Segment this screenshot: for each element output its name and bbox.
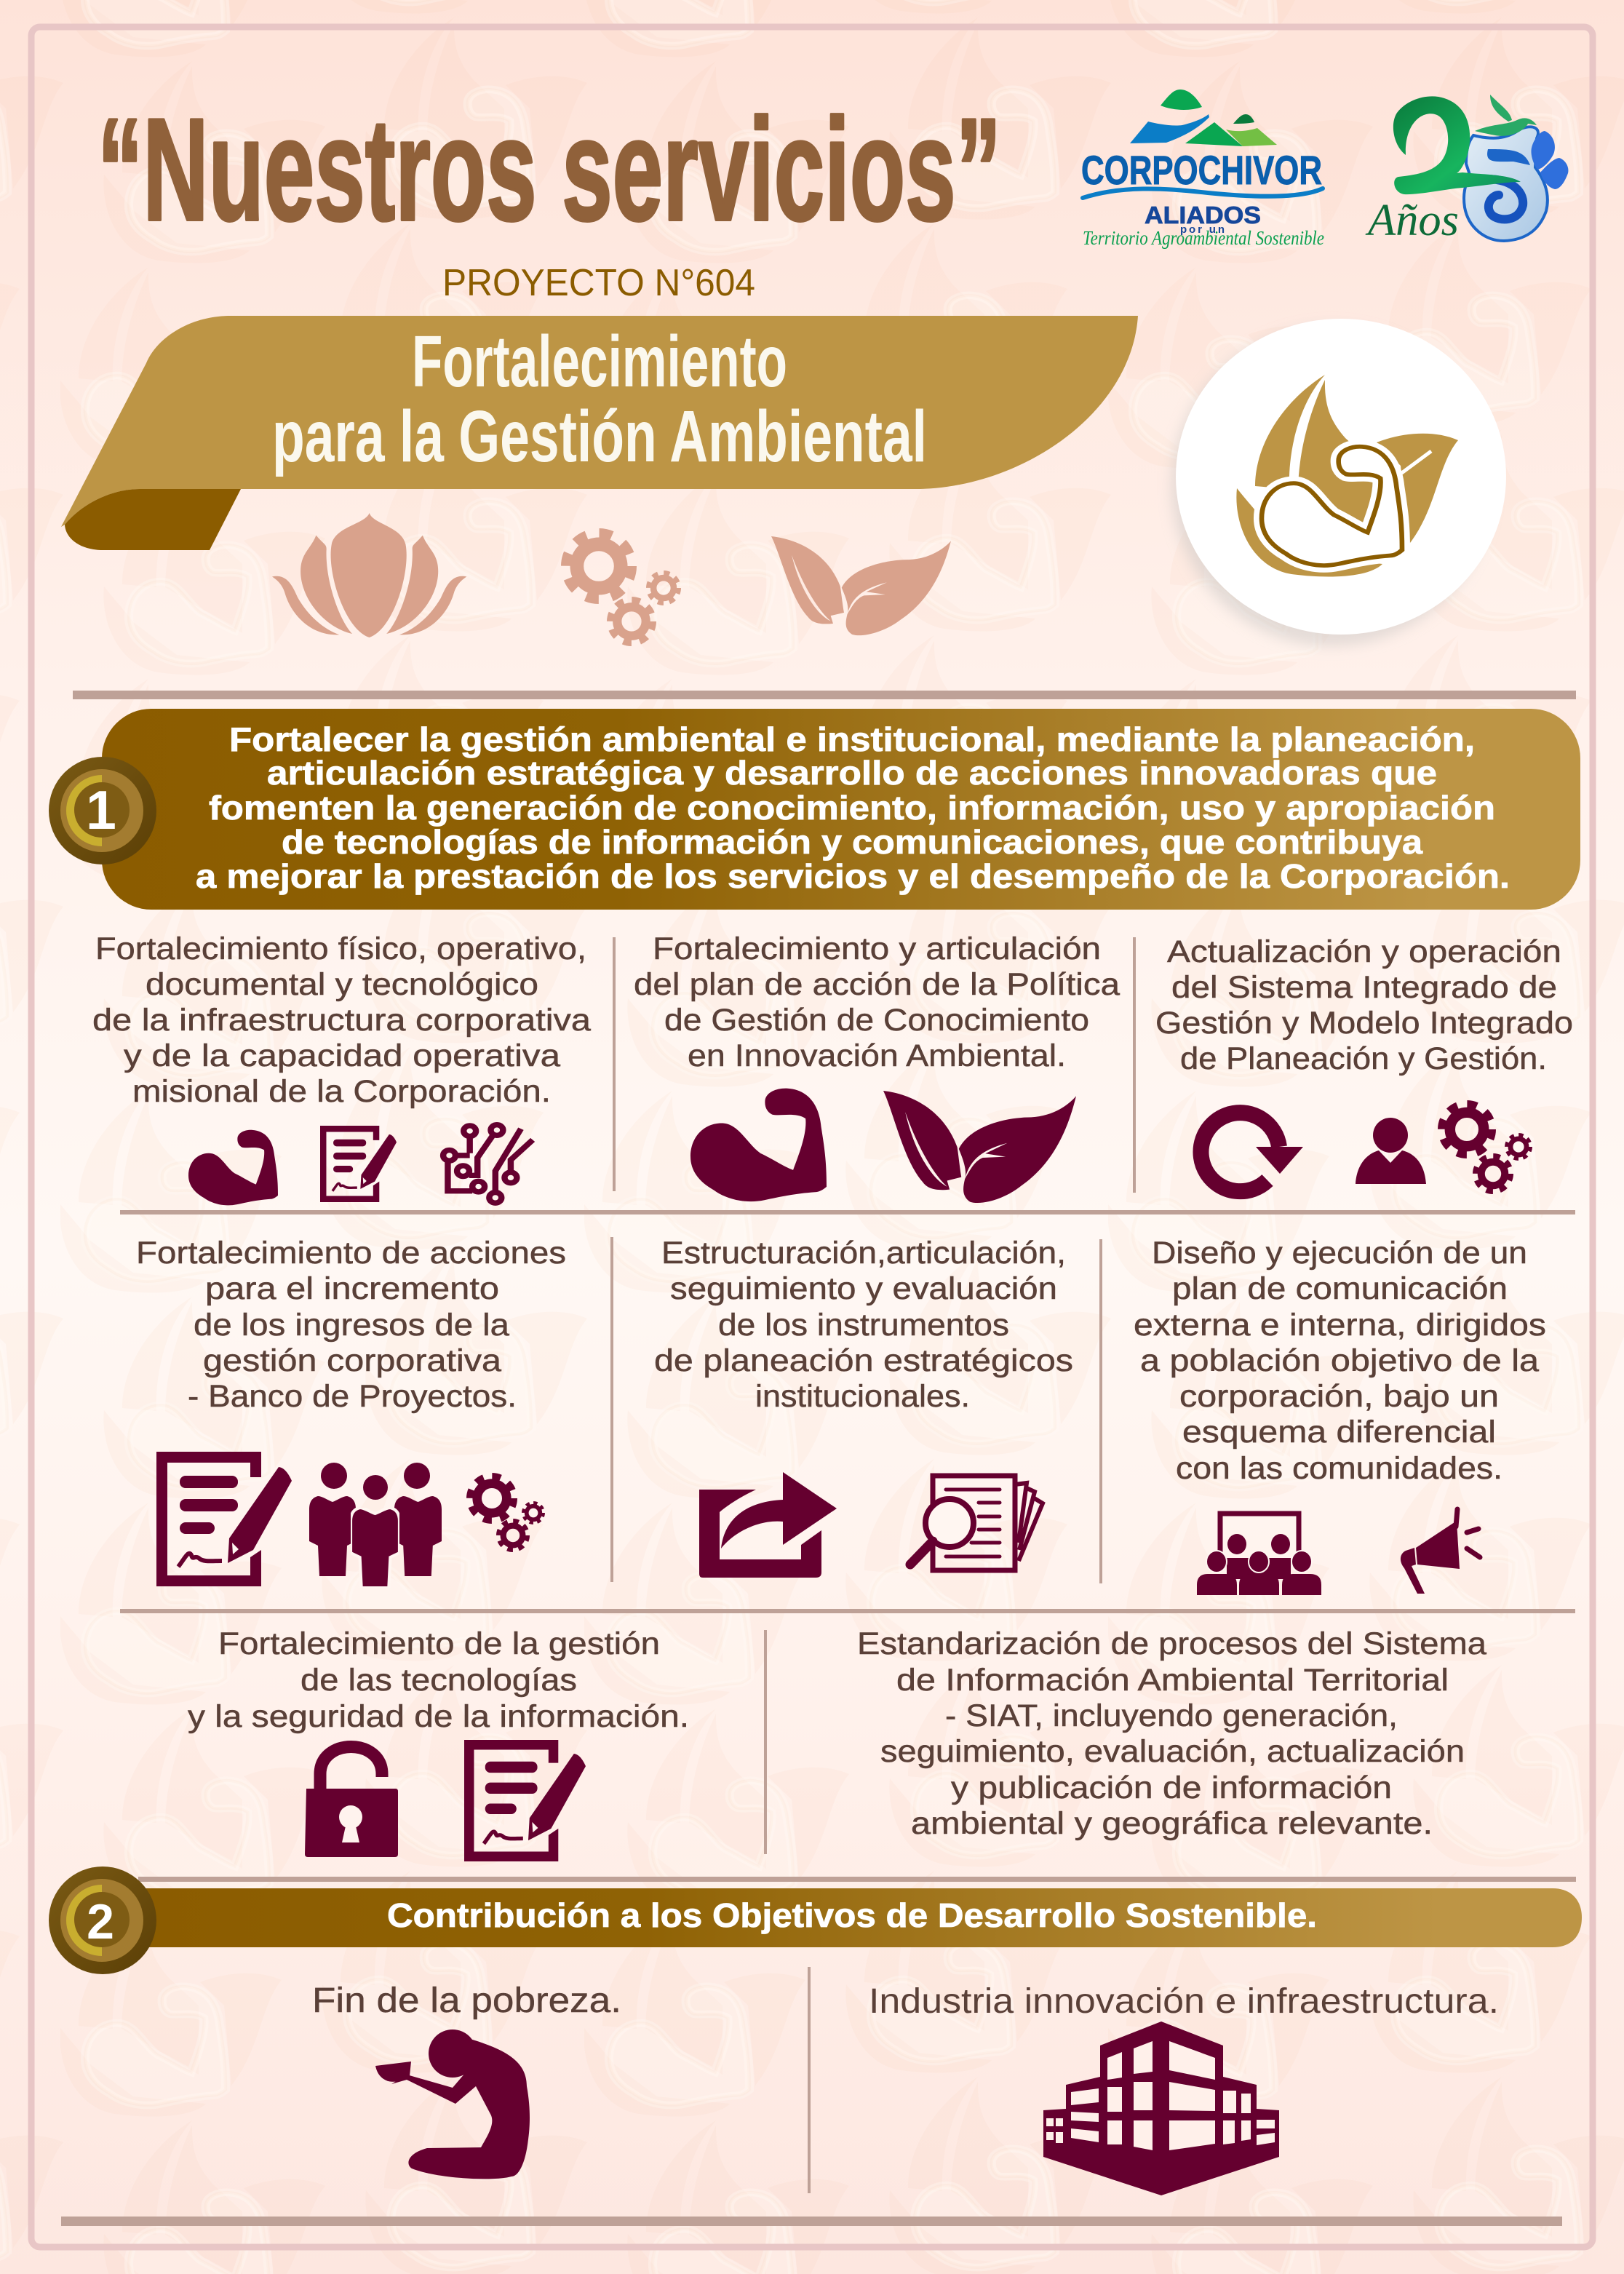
logo: 25 años: [1365, 95, 1568, 245]
divider: [120, 1609, 1575, 1613]
text block: del plan de acción de la Política: [634, 967, 1120, 1002]
panel: industria: [869, 1982, 1499, 2195]
text block: Actualización y operación: [1167, 934, 1561, 969]
text block: misional de la Corporación.: [132, 1074, 551, 1109]
divider: [120, 1210, 1575, 1214]
text block: de planeación estratégicos: [654, 1343, 1073, 1378]
banner text: Contribución a los Objetivos de Desarrollo Sostenible.: [387, 1896, 1317, 1934]
circle shadow: [1171, 326, 1492, 646]
butterfly: [1531, 131, 1568, 189]
objective text: de tecnologías de información y comunicaciones, que contribuya: [282, 823, 1422, 861]
panel: row 3 right text: de Información Ambiental Territorial: [896, 1663, 1449, 1698]
logo mountains: [1130, 90, 1277, 146]
icon: beggar: [375, 2029, 530, 2179]
icon: gears: [1442, 1105, 1530, 1191]
icon: team: [309, 1463, 442, 1588]
panel: row 2 column 2: [654, 1236, 1073, 1578]
icon: peach gears: [566, 533, 679, 643]
icon: building: [1043, 2021, 1279, 2195]
objective pill: [102, 709, 1580, 910]
text block: Fortalecimiento de acciones: [136, 1236, 566, 1271]
text block: y de la capacidad operativa: [124, 1038, 560, 1073]
panel: row 2 column 1: [136, 1236, 566, 1588]
icon: arm: [690, 1089, 827, 1201]
text block: de los instrumentos: [718, 1308, 1009, 1343]
ribbon title line 2: para la Gestión Ambiental: [272, 396, 927, 477]
text block: de los ingresos de la: [194, 1308, 509, 1343]
vertical divider: [764, 1630, 767, 1854]
text block: [1134, 1236, 1546, 1486]
text block: institucionales.: [755, 1379, 970, 1414]
vertical divider: [1099, 1239, 1102, 1583]
title: “Nuestros servicios”: [97, 89, 1001, 251]
panel: row 3 right text: ambiental y geográfica relevante.: [911, 1806, 1433, 1841]
panel: row 3 right text: - SIAT, incluyendo generación,: [945, 1698, 1398, 1733]
panel: row 3 right text: y publicación de información: [951, 1770, 1392, 1805]
white circle: [1176, 319, 1506, 635]
vertical divider: [613, 937, 616, 1191]
ribbon fold: [65, 489, 241, 550]
text block: para el incremento: [205, 1271, 499, 1306]
badge 1: [49, 757, 156, 864]
logo: Corpochivor: [1081, 90, 1324, 249]
text block: [634, 931, 1120, 1073]
logo por un: por un: [1180, 223, 1225, 236]
anos: Años: [1365, 196, 1459, 245]
ribbon body: [61, 316, 1138, 527]
icon: padlock: [305, 1746, 398, 1857]
text block: Fortalecimiento y articulación: [653, 931, 1101, 966]
panel: row 3 right text: seguimiento, evaluación, actualización: [880, 1734, 1465, 1769]
objective text: fomenten la generación de conocimiento, información, uso y apropiación: [209, 789, 1495, 827]
panel: row 1 column 1: [92, 931, 591, 1205]
icon: arm: [188, 1130, 278, 1205]
text block: documental y tecnológico: [146, 967, 538, 1002]
project number: PROYECTO N°604: [442, 262, 755, 304]
section 2 banner: [138, 1888, 1582, 1947]
logo name: CORPOCHIVOR: [1081, 147, 1322, 193]
text block: Fortalecimiento de la gestión: [218, 1626, 660, 1661]
text block: - Banco de Proyectos.: [188, 1379, 517, 1414]
icon: signed document: [320, 1126, 397, 1202]
panel: row 3 right text: [857, 1626, 1486, 1841]
vertical divider: [1133, 937, 1136, 1193]
badge 1: 1: [86, 779, 116, 840]
badge 2: [49, 1866, 156, 1974]
ribbon: [61, 316, 1138, 550]
text block: corporación, bajo un: [1179, 1379, 1499, 1414]
text block: a población objetivo de la: [1140, 1343, 1539, 1378]
text block: Fortalecimiento físico, operativo,: [95, 931, 586, 966]
text block: gestión corporativa: [203, 1343, 501, 1378]
text block: Estructuración,articulación,: [661, 1236, 1066, 1271]
text block: [92, 931, 591, 1109]
label: Industria innovación e infraestructura.: [869, 1982, 1499, 2021]
text block: con las comunidades.: [1176, 1451, 1502, 1486]
icon: peach leaves: [771, 536, 951, 635]
text block: plan de comunicación: [1172, 1271, 1508, 1306]
text block: de Gestión de Conocimiento: [664, 1003, 1089, 1038]
icon: lotus: [272, 513, 466, 637]
objective text: a mejorar la prestación de los servicios y el desempeño de la Corporación.: [196, 857, 1510, 895]
icon: refresh: [1201, 1113, 1303, 1191]
emblem leaves: [1236, 375, 1458, 576]
vertical divider: [808, 1967, 811, 2193]
panel: row 2 column 3: [1134, 1236, 1546, 1595]
icon: person: [1356, 1118, 1426, 1184]
divider: [73, 691, 1576, 699]
panel: row 3 left: [188, 1626, 689, 1861]
text block: [1155, 934, 1573, 1076]
text block: esquema diferencial: [1182, 1415, 1496, 1450]
objective text: Fortalecer la gestión ambiental e institucional, mediante la planeación,: [229, 720, 1475, 758]
text block: [136, 1236, 566, 1414]
label: Fin de la pobreza.: [312, 1981, 621, 2020]
text block: [654, 1236, 1073, 1414]
divider: [138, 1877, 1576, 1882]
number 5 swirl: [1484, 149, 1530, 219]
text block: del Sistema Integrado de: [1171, 970, 1557, 1005]
icon: circuit: [443, 1125, 533, 1203]
number 2: [1393, 96, 1521, 194]
panel: fin de la pobreza: [312, 1981, 621, 2179]
icon: leaves: [883, 1091, 1076, 1203]
icon: audience: [1197, 1514, 1321, 1595]
text block: Gestión y Modelo Integrado: [1155, 1006, 1573, 1041]
text block: y la seguridad de la información.: [188, 1699, 689, 1734]
bottom divider: [61, 2217, 1562, 2226]
icon: document search: [910, 1476, 1043, 1570]
text block: en Innovación Ambiental.: [688, 1038, 1066, 1073]
text block: de la infraestructura corporativa: [92, 1003, 591, 1038]
number 5 disc: [1464, 127, 1548, 241]
panel: row 3 right text: Estandarización de procesos del Sistema: [857, 1626, 1486, 1661]
emblem arm: [1262, 447, 1402, 565]
logo slogan: Territorio Agroambiental Sostenible: [1083, 227, 1324, 249]
badge 2: 2: [87, 1894, 114, 1949]
icon: megaphone: [1401, 1509, 1480, 1594]
text block: [188, 1626, 689, 1734]
panel: row 1 column 3: [1155, 934, 1573, 1191]
icon: signed document: [464, 1740, 586, 1861]
text block: externa e interna, dirigidos: [1134, 1308, 1546, 1343]
icon: share: [699, 1472, 837, 1578]
text block: seguimiento y evaluación: [670, 1271, 1057, 1306]
panel: row 1 column 2: [634, 931, 1120, 1203]
text block: de las tecnologías: [300, 1663, 577, 1698]
hummingbird: [1475, 95, 1537, 136]
text block: Diseño y ejecución de un: [1152, 1236, 1527, 1271]
icon: gears: [470, 1476, 544, 1550]
vertical divider: [610, 1237, 613, 1582]
ribbon title line 1: Fortalecimiento: [412, 321, 787, 402]
emblem circle: [1171, 319, 1506, 646]
logo aliados: ALIADOS: [1145, 202, 1261, 228]
objective text: articulación estratégica y desarrollo de acciones innovadoras que: [267, 754, 1437, 792]
icon: signed document: [156, 1452, 292, 1586]
text block: de Planeación y Gestión.: [1180, 1041, 1547, 1076]
logo wave: [1083, 188, 1323, 198]
objective text: [196, 720, 1510, 895]
